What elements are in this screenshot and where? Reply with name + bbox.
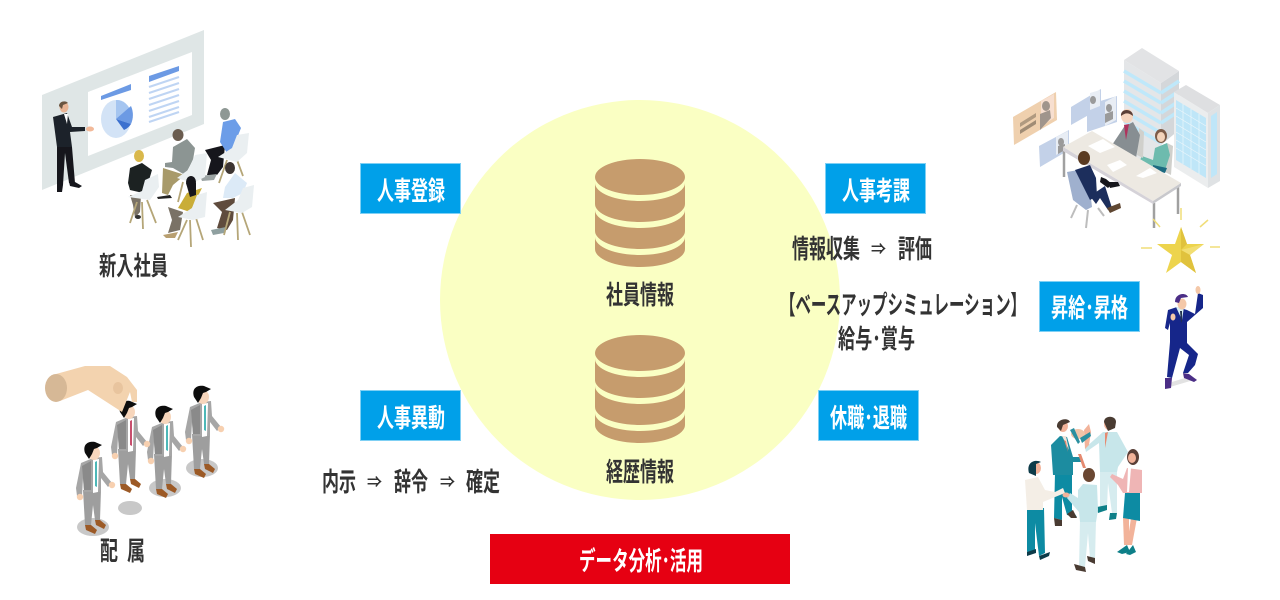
icon: star with rays: [1141, 208, 1220, 273]
presenter: [53, 101, 94, 192]
badge: raises and promotion: [1040, 282, 1140, 332]
interviewer legs: [1100, 177, 1120, 188]
badge: leave and retirement: 休職･退職: [830, 403, 907, 433]
attendee front left: [128, 150, 159, 229]
badge: personnel transfer: [360, 390, 460, 440]
text: notice, appointment, confirmation: 内示: [322, 467, 356, 497]
attendee grey sweater: [157, 129, 207, 202]
illustration: seminar for new employees: [42, 30, 254, 247]
illustration: hand placing employees: [45, 366, 224, 536]
badge: raises and promotion: 昇給･昇格: [1051, 293, 1128, 323]
tower building: [1124, 48, 1179, 172]
attendee yellow blouse: [163, 176, 207, 247]
man in white sweater: [1025, 461, 1065, 560]
badge: leave and retirement: [818, 390, 918, 440]
employee picked up: [111, 401, 150, 493]
central circle: [440, 100, 840, 500]
label: assignment: 属: [127, 536, 145, 566]
label: career history: 経歴情報: [606, 457, 674, 487]
banner: data analysis: [490, 534, 790, 584]
man in teal suit: [1051, 419, 1082, 526]
label: assignment: 配: [100, 536, 118, 566]
table: [1063, 131, 1181, 204]
illustration: evaluation meeting: [1013, 48, 1220, 228]
label: employee information: 社員情報: [606, 280, 674, 310]
badge: personnel evaluation: 人事考課: [842, 176, 910, 206]
text: notice, appointment, confirmation: ⇒: [440, 474, 455, 491]
man interviewer: [1110, 109, 1144, 158]
badge: personnel registration: 人事登録: [377, 176, 445, 206]
database: employee information: [595, 159, 685, 310]
bouquet: [1070, 428, 1091, 468]
badge: personnel registration: [360, 164, 460, 214]
text: salary and bonus: 給与･賞与: [838, 324, 915, 354]
text: base-up simulation: 【ベースアップシミュレーション】: [780, 290, 1026, 320]
employee shadows: [77, 459, 218, 536]
text: notice, appointment, confirmation: 確定: [466, 467, 500, 497]
attendee blue shirt: [200, 108, 249, 183]
badge: personnel transfer: 人事異動: [377, 403, 445, 433]
text: information collection to evaluation: 情報収集: [792, 234, 860, 264]
office building: [1174, 85, 1220, 188]
profile card tan: [1013, 92, 1057, 145]
banner: data analysis: データ分析･活用: [579, 546, 703, 576]
presentation wall: [42, 30, 204, 190]
employee front: [76, 442, 115, 534]
man in light suit from behind: [1062, 468, 1098, 572]
illustration: celebrating employee: [1165, 286, 1203, 389]
label: assignment: [100, 536, 145, 566]
woman in pink: [1110, 449, 1142, 555]
woman interviewer: [1140, 129, 1173, 175]
text: information collection to evaluation: 評価: [898, 234, 932, 264]
hand: [45, 366, 137, 412]
attendee light shirt: [211, 162, 254, 240]
text: notice, appointment, confirmation: 辞令: [394, 467, 428, 497]
slide: [88, 52, 192, 156]
text: notice, appointment, confirmation: ⇒: [367, 474, 382, 491]
label: new employees: 新入社員: [99, 251, 168, 281]
employee third: [147, 406, 186, 498]
database: career history: [595, 335, 685, 487]
man in light suit with beard: [1084, 417, 1128, 520]
employee far right: [185, 386, 224, 478]
candidate in blue chair: [1067, 151, 1121, 228]
text: information collection to evaluation: ⇒: [871, 241, 886, 258]
illustration: team celebrating: [1025, 417, 1142, 572]
table legs: [1064, 150, 1178, 228]
badge: personnel evaluation: [826, 164, 926, 214]
profile cards blue: [1039, 89, 1117, 167]
text: notice, appointment, confirmation: [322, 467, 500, 497]
